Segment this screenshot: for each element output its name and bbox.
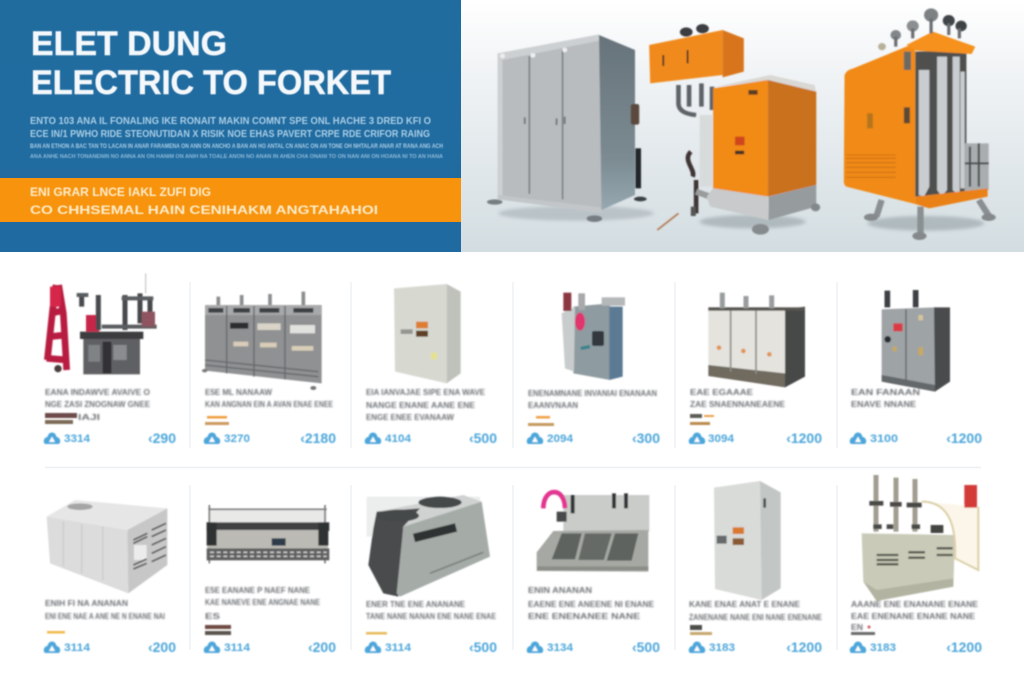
product text: ES: [205, 611, 220, 621]
product text: AAANE ENE ENANANE ENANE: [851, 599, 978, 609]
product card 6: ‹1200: [946, 430, 982, 446]
product card 1: ‹290: [148, 430, 176, 446]
product text: [45, 387, 150, 422]
product card 6: 3100: [870, 433, 898, 445]
product text: E5E EANANE P NAEF NANE: [205, 585, 310, 595]
product text: EAE EGAAAE: [690, 387, 753, 397]
product text: EAE ENENANE ENANE NANE: [851, 611, 975, 621]
header description text: [30, 116, 443, 160]
icon: orange two-part unit: [649, 24, 820, 235]
product card 6: [850, 290, 982, 446]
product card 10: ‹500: [632, 639, 660, 655]
product card 12: 3183: [870, 642, 896, 654]
product text: IAJI: [78, 412, 100, 422]
product text: [690, 387, 785, 409]
product card 4: [527, 293, 660, 446]
panel: hero equipment photo: [461, 0, 1024, 252]
product text: TANE NANE NANAN ENE NANE ENAE: [366, 611, 496, 621]
product card 7: ‹200: [148, 639, 176, 655]
product card 8: 3114: [224, 642, 251, 654]
product card 7: 3114: [64, 642, 91, 654]
orange callout band: [0, 178, 461, 222]
product card 11: 3183: [709, 642, 735, 654]
product text: ENAVE NNANE: [851, 399, 916, 409]
product card 8: ‹200: [308, 639, 336, 655]
product card 3: 4104: [385, 433, 412, 445]
product text: NGE ZASI ZNOGNAW GNEE: [45, 399, 150, 409]
product card 5: [689, 293, 822, 446]
product text: [528, 585, 654, 621]
product card 4: ‹300: [632, 430, 660, 446]
product card 11: [689, 481, 822, 655]
product card 10: [527, 492, 660, 655]
product text: ZANENANE NANE ENI NANE ENENANE: [689, 612, 822, 622]
product text: [45, 598, 165, 621]
product text: KANE ENAE ANAT E ENANE: [689, 599, 800, 609]
product text: [205, 387, 333, 409]
product text: EAN FANAAN: [851, 387, 920, 397]
product text: E5E ML NANAAW: [205, 387, 273, 397]
product text: ZAE SNAENNANEAENE: [690, 399, 785, 409]
product text: EANA INDAWVE AVAIVE O: [45, 387, 150, 397]
product text: EN: [851, 622, 863, 632]
product text: ENGE ENEE EVANAAW: [366, 412, 455, 422]
orange callout band: ENI GRAR LNCE IAKL ZUFI DIG: [30, 185, 211, 199]
product card 3: ‹500: [469, 430, 497, 446]
product text: [528, 388, 657, 410]
icon: orange unit with columns: [844, 8, 996, 240]
product card 5: ‹1200: [786, 430, 822, 446]
product text: [366, 387, 485, 422]
title: ELET DUNG: [31, 25, 227, 63]
product card 12: ‹1200: [946, 639, 982, 655]
product text: KAE NANEVE ENE ANGNAE NANE: [205, 597, 320, 607]
header description text: ECE IN/1 PWHO RIDE STEONUTIDAN X RISIK NOE EHAS PAVERT CRPE RDE CRIFOR RAING: [30, 129, 430, 140]
product text: EAANVNAAN: [528, 400, 578, 410]
product text: [851, 599, 978, 632]
header description text: ANA ANHE NACH TONANENIN NO ANNA AN ON HANIM ON ANIH NA TOALE ANON NO ANAN IN AHEN CHA ONANI TO ON NAN ANI ON HOANA NI TO AN HANA: [30, 154, 443, 160]
product text: ENIN ANANAN: [528, 585, 592, 595]
title: ELECTRIC TO FORKET: [31, 64, 391, 102]
product text: EAENE ENE ANEENE NI ENANE: [528, 599, 654, 609]
product text: [205, 585, 320, 621]
product text: ENENAMNANE INVANIAI ENANAAN: [528, 388, 657, 398]
header description text: ENTO 103 ANA IL FONALING IKE RONAIT MAKIN COMNT SPE ONL HACHE 3 DRED KFI O: [30, 116, 431, 127]
product text: ENI ENE NAE A ANE NE N ENANE NAI: [45, 611, 165, 621]
product card 12: [850, 475, 982, 655]
orange callout band: CO CHHSEMAL HAIN CENIHAKM ANGTAHAHOI: [30, 203, 378, 217]
product text: ENER TNE ENE ANANANE: [366, 599, 465, 609]
product card 11: ‹1200: [786, 639, 822, 655]
product text: NANGE ENANE AANE ENE: [366, 400, 475, 410]
product text: [851, 387, 920, 409]
product card 1: [44, 273, 176, 446]
product card 4: 2094: [547, 433, 574, 445]
product text: KAN ANGNAN EIN A AVAN ENAE ENEE: [205, 399, 333, 409]
panel: header banner: [0, 0, 461, 252]
product card 9: ‹500: [469, 639, 497, 655]
product card 1: 3314: [64, 433, 91, 445]
product card 7: [44, 500, 176, 655]
product text: ENE ENENANEE NANE: [528, 611, 640, 621]
product card 2: 3270: [224, 433, 250, 445]
title: [31, 25, 391, 102]
product card 10: 3134: [547, 642, 574, 654]
product card 3: [365, 284, 497, 446]
product card 2: ‹2180: [300, 430, 336, 446]
product card 9: 3114: [385, 642, 412, 654]
product card 5: 3094: [708, 433, 735, 445]
header description text: BAN AN ETHON A BAC TAN TO LACAN IN ANAR FARAMENA ON ANN ON ANCHO A BAN AN HO ANTAL CN ANAC ON AN TONE OH NHTALAR ANAR AT RANA ANG ACH: [30, 144, 443, 150]
product card 8: [204, 505, 336, 655]
product text: [366, 599, 496, 621]
product text: EIA IANVAJAE SIPE ENA WAVE: [366, 387, 485, 397]
card dividers: [190, 282, 837, 650]
product card 9: [365, 495, 497, 655]
product text: [689, 599, 822, 622]
icon: grey cabinet: [487, 34, 654, 222]
product card 2: [202, 292, 336, 446]
product text: ENIH FI NA ANANAN: [45, 598, 128, 608]
